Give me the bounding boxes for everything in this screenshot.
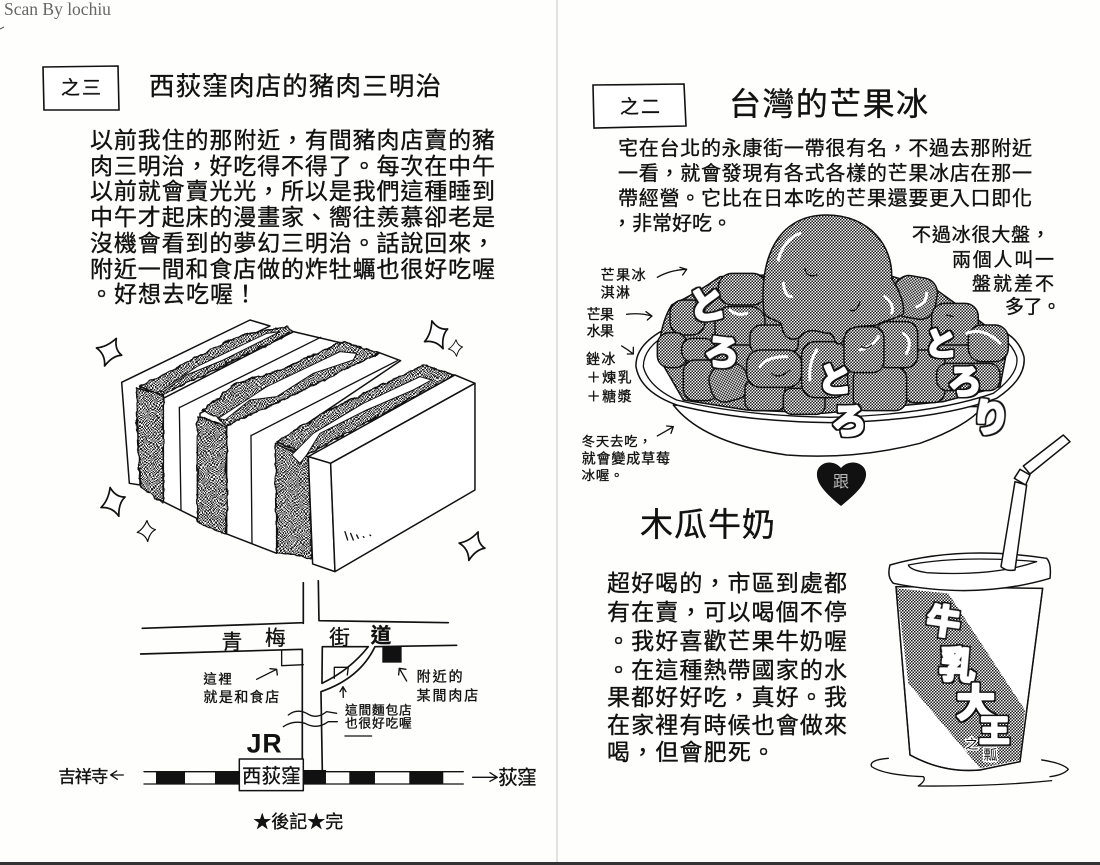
section tag 之二: 之二 [620,96,660,118]
ingredient labels: 芒果 [587,306,614,322]
illustration: katsu sandwich [122,320,475,572]
map arrows [257,668,407,736]
break in road [283,711,337,727]
text block: sandwich description: 以前我住的那附近，有間豬肉店賣的豬 [90,127,495,153]
onomatopoeia とろとろり: ろ [832,393,867,444]
street name: 街 [329,626,350,649]
ingredient labels: 冬天去吃， [582,434,652,449]
onomatopoeia とろとろり [685,273,1012,445]
onomatopoeia とろとろり: と [818,353,852,402]
footer note: ★後記★完 [253,812,343,832]
panel: papaya milk [607,435,1070,786]
text block: papaya milk description [607,570,847,765]
heading: papaya milk: 木瓜牛奶 [640,506,775,543]
section tag 之三: 之三 [61,77,101,99]
cup label text: 牛 [924,592,964,645]
ice cream scoop [763,215,904,344]
map labels: 這裡 [203,670,232,686]
map labels: 就是和食店 [203,689,279,705]
section tag 之二 [593,84,686,128]
text block: sandwich description: 。好想去吃喔！ [90,281,257,307]
onomatopoeia とろとろり: と [685,273,728,331]
cup label text: 瓢 [983,747,997,763]
cup label text [924,592,1009,763]
chart: hand-drawn station map [58,581,537,832]
text block: mango ice description: 帶經營。它比在日本吃的芒果還要更入口即化 [618,187,1032,210]
text block: sandwich description: 以前就會賣光光，所以是我們這種睡到 [90,178,495,204]
side note: 盤就差不 [972,273,1054,295]
roads [141,581,457,770]
side note: 兩個人叫一 [952,249,1054,271]
illustration: mango shaved ice [582,215,1024,483]
map labels: 附近的 [417,668,463,684]
mango mound base [658,275,1008,413]
direction labels: 荻窪 [498,767,537,789]
sparkles [91,317,489,564]
ingredient labels: 淇淋 [601,284,630,300]
onomatopoeia とろとろり: り [969,387,1012,445]
onomatopoeia とろとろり: ろ [948,354,982,403]
panel: right page mango ice [582,84,1061,506]
street name: 梅 [265,627,286,650]
map labels: 也很好吃喔 [345,716,412,731]
station box [239,759,303,791]
panel: left page sandwich column [43,66,537,832]
text block: sandwich description: 附近一間和食店做的炸牡蠣也很好吃喔 [90,256,495,282]
ingredient labels [582,267,670,483]
text block: sandwich description [90,127,495,307]
cup label text: 乳 [938,634,979,691]
text block: papaya milk description: 喝，但會肥死。 [607,739,775,765]
railway [144,770,463,784]
direction labels [58,766,537,789]
onomatopoeia とろとろり: と [925,319,957,365]
map buildings [282,647,402,678]
direction labels: 吉祥寺 [58,766,108,786]
heading: pork sandwich: 西荻窪肉店的豬肉三明治 [149,73,441,101]
bread slices [122,320,401,553]
JR logo: JR [247,728,282,758]
heading: Taiwan mango ice: 台灣的芒果冰 [729,86,928,122]
icon: black heart: 跟 [833,473,849,491]
side note [912,224,1061,318]
exposed bread inside filling [160,332,432,463]
side note: 多了。 [1005,296,1061,318]
street name: 道 [371,625,392,648]
ingredient labels: ＋糖漿 [587,389,632,405]
icon: black heart [817,463,866,506]
cup label text: 之 [965,736,978,751]
ingredient labels: 銼冰 [586,351,615,367]
text block: papaya milk description: 超好喝的，市區到處都 [607,570,847,596]
mango cubes [657,273,1008,414]
front bread slice [308,375,475,572]
cup label text: 王 [979,707,1009,751]
callout arrows [622,267,687,436]
map labels: 這間麵包店 [345,702,412,717]
ingredient labels: 芒果冰 [601,267,646,283]
plate [636,327,1024,456]
text block: mango ice description: ，非常好吃。 [612,212,732,235]
text block: papaya milk description: 有在賣，可以喝個不停 [607,599,847,625]
cup label text: 大 [957,674,995,729]
map labels [203,668,478,731]
text block: mango ice description: 宅在台北的永康街一帶很有名，不過去那附近 [618,137,1032,160]
station box: 西荻窪 [242,766,301,788]
ingredient labels: ＋煉乳 [587,370,632,386]
text block: papaya milk description: 。我好喜歡芒果牛奶喔 [607,628,847,654]
street name [222,625,392,654]
text block: papaya milk description: 果都好好吃，真好。我 [607,684,847,710]
text block: papaya milk description: 在家裡有時候也會做來 [607,712,847,738]
cup body [896,587,1043,770]
mango highlights [730,293,1000,380]
text block: sandwich description: 沒機會看到的夢幻三明治。話說回來， [90,230,495,256]
text block: sandwich description: 肉三明治，好吃得不得了。每次在中午 [90,153,495,179]
street name: 青 [222,631,242,654]
text block: papaya milk description: 。在這種熱帶國家的水 [607,657,847,683]
puddle [871,758,1068,786]
text block: sandwich description: 中午才起床的漫畫家、嚮往羨慕卻老是 [90,204,495,230]
section tag 之三 [43,66,119,110]
text block: mango ice description: 一看，就會發現有各式各樣的芒果冰店在那一 [618,162,1032,185]
cup lid [889,553,1050,591]
pork cutlet filling [136,327,455,558]
ingredient labels: 就會變成草莓 [582,450,670,466]
illustration: milk cup [871,435,1070,786]
map labels: 某間肉店 [417,688,478,704]
text block: mango ice description [612,137,1032,235]
side note: 不過冰很大盤， [912,224,1050,246]
onomatopoeia とろとろり: ろ [702,323,743,378]
ingredient labels: 冰喔。 [582,468,623,483]
straw [1001,435,1070,570]
ingredient labels: 水果 [587,323,614,339]
